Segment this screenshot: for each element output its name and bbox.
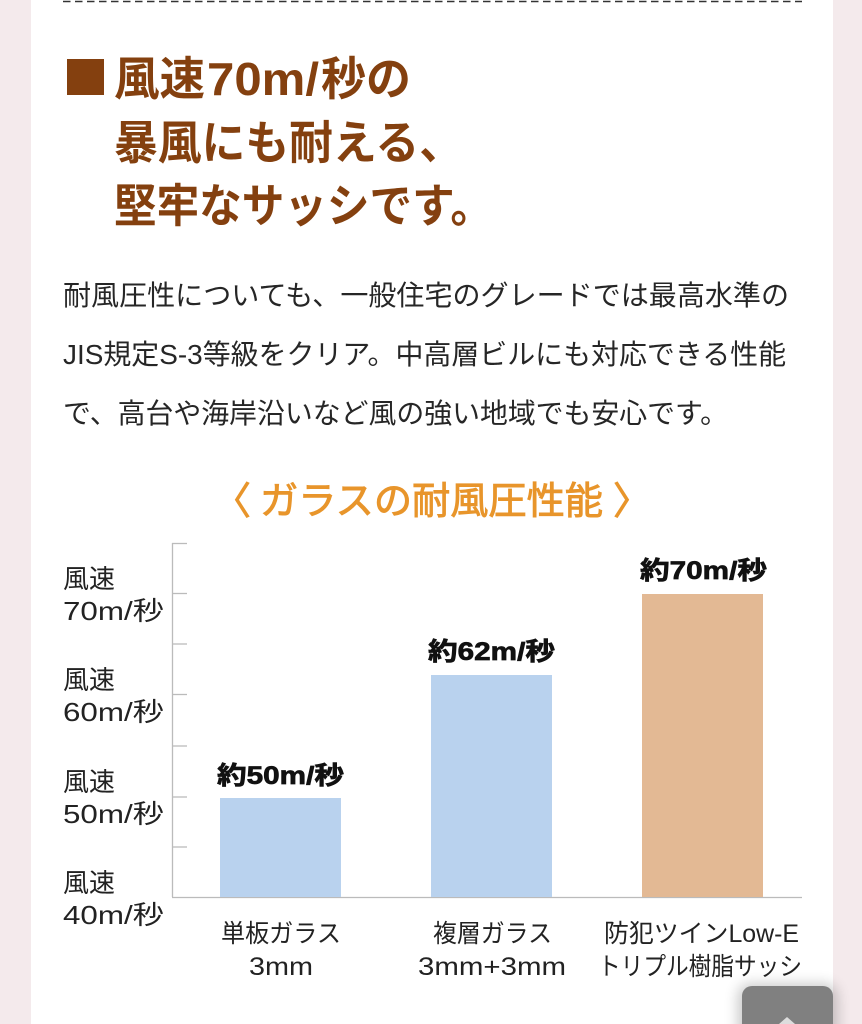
bar chart: glass wind pressure performance <box>63 543 802 981</box>
bar: double glazing: 約62m/秒 <box>428 638 555 666</box>
y axis labels: 60m/秒 <box>63 697 164 727</box>
text block: description: で、高台や海岸沿いなど風の強い地域でも安心です。 <box>63 398 728 429</box>
bar: security twin Low-E triple resin sash: 約70m/秒 <box>640 557 767 585</box>
heading line 1: 秒の <box>321 53 411 105</box>
y axis labels: 40m/秒 <box>63 900 164 930</box>
heading: wind speed sash <box>67 53 493 232</box>
bar: single pane glass: 3mm <box>249 953 313 981</box>
bar: single pane glass: 約50m/秒 <box>217 762 344 790</box>
icon: scroll to top button <box>738 984 837 1024</box>
chart axes <box>172 543 802 898</box>
icon: heading square bullet <box>67 59 104 95</box>
chart title: ガラスの耐風圧性能 <box>260 481 603 523</box>
text block: description <box>63 280 789 429</box>
heading line 1: 風速 <box>114 53 205 105</box>
text block: description: JIS規定S-3等級をクリア。中高層ビルにも対応できる性能 <box>63 339 786 370</box>
bar: double glazing <box>418 638 566 981</box>
y axis labels: 風速 <box>63 665 115 695</box>
y axis labels: 風速 <box>63 868 115 898</box>
heading line 2: 暴風にも耐える、 <box>114 117 463 169</box>
bar: double glazing: 3mm+3mm <box>418 953 566 981</box>
text block: description: 耐風圧性についても、一般住宅のグレードでは最高水準の <box>63 280 789 311</box>
heading line 1: 70m/ <box>207 53 319 105</box>
heading line 3: 堅牢なサッシです。 <box>114 180 493 232</box>
bar: double glazing: 複層ガラス <box>433 920 552 948</box>
y axis labels: 50m/秒 <box>63 799 164 829</box>
chart title: 〈 <box>213 481 251 523</box>
y axis labels: 70m/秒 <box>63 596 164 626</box>
y axis labels <box>63 564 164 930</box>
bar: single pane glass <box>217 762 344 981</box>
y axis labels: 風速 <box>63 767 115 797</box>
heading line 1 <box>114 53 411 105</box>
bar: security twin Low-E triple resin sash: トリプル樹脂サッシ <box>598 953 802 981</box>
bar: single pane glass: 単板ガラス <box>221 920 341 948</box>
bar: security twin Low-E triple resin sash: 防犯ツインLow-E <box>604 920 799 948</box>
bar: security twin Low-E triple resin sash <box>598 557 802 981</box>
chart title: 〉 <box>613 481 651 523</box>
y axis labels: 風速 <box>63 564 115 594</box>
